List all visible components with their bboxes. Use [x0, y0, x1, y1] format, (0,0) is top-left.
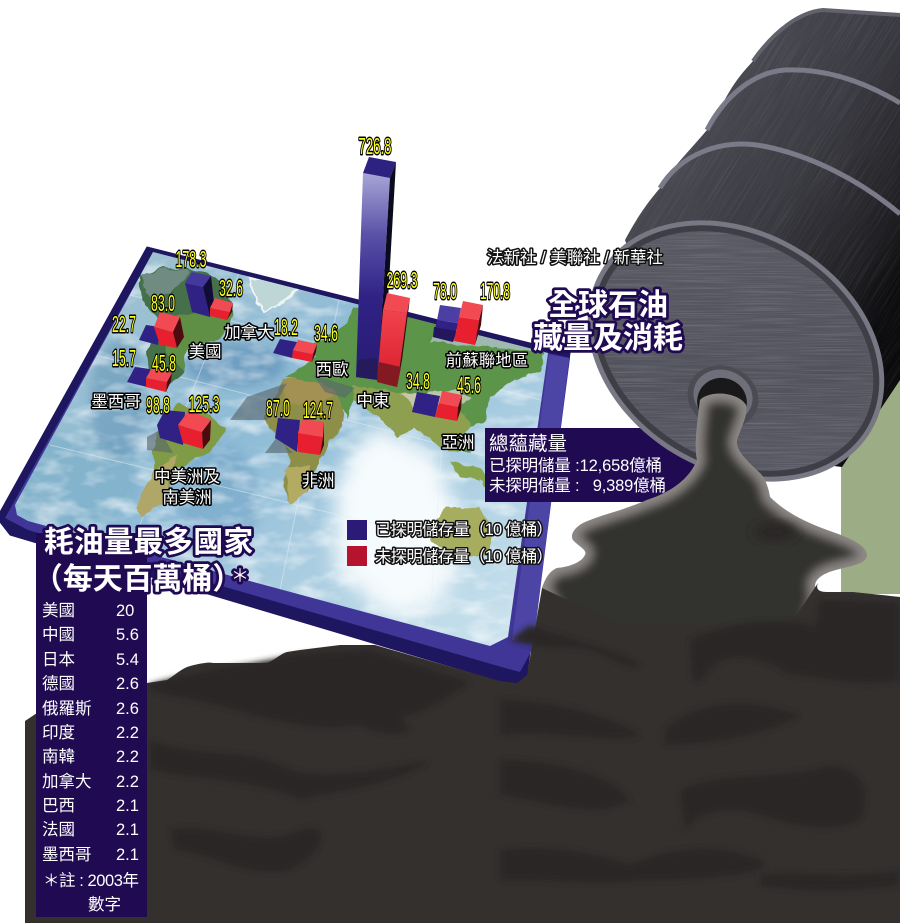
dark oil folds — [150, 600, 900, 891]
bar value labels: 78.0 — [433, 278, 457, 304]
graticule — [50, 270, 560, 620]
bar value labels: 34.8 — [406, 368, 430, 394]
legend: unproven reserves: 未探明儲存量（10 億桶） — [375, 547, 553, 566]
main title: 藏量及消耗 — [533, 322, 683, 355]
bar value labels: 170.8 — [480, 278, 510, 304]
bar value labels: 45.6 — [457, 372, 481, 398]
consumption list: 日本 — [42, 650, 75, 669]
consumption list: 巴西 — [42, 797, 75, 815]
north america — [140, 267, 233, 395]
consumption list: 2.6 — [116, 700, 139, 718]
bar value labels: 15.7 — [112, 345, 136, 371]
consumption list: 中國 — [42, 625, 75, 644]
bar value labels: 32.6 — [219, 275, 243, 301]
bar value labels: 125.3 — [188, 391, 220, 417]
barrel bung — [679, 356, 767, 438]
bar pair: Central and South America — [157, 410, 211, 449]
white ocean spray — [335, 425, 460, 620]
main title: 全球石油 — [548, 289, 668, 322]
bar value labels: 87.0 — [266, 395, 290, 421]
panel heading: 耗油量最多國家 — [44, 526, 253, 559]
green background panel — [841, 370, 900, 594]
source credit: 法新社 / 美聯社 / 新華社 — [487, 248, 663, 267]
bar shadows — [147, 375, 355, 453]
total reserves callout box — [485, 428, 700, 502]
bar value labels: 178.3 — [176, 246, 206, 272]
bar pair: USA — [139, 312, 184, 348]
bar pair: Mexico — [127, 367, 172, 392]
map board — [0, 240, 570, 683]
consumption list: 5.4 — [116, 651, 139, 669]
barrel body — [625, 8, 900, 467]
region labels: 美國 — [188, 342, 222, 361]
bar pair: former Soviet states — [433, 301, 483, 345]
consumption list: 5.6 — [116, 626, 139, 644]
region labels: 前蘇聯地區 — [446, 351, 528, 370]
total reserves callout box: 未探明儲量 : 9,389億桶 — [489, 476, 666, 495]
region labels: 中美洲及 — [154, 467, 220, 486]
consumption list: 美國 — [42, 601, 75, 620]
panel heading: （每天百萬桶） — [33, 563, 242, 596]
region labels: 中東 — [356, 391, 390, 410]
bar value labels: 83.0 — [151, 290, 175, 316]
bar pair: Middle East — [356, 157, 410, 387]
bar value labels: 124.7 — [303, 397, 333, 423]
legend — [347, 520, 553, 566]
consumption list: 德國 — [42, 674, 75, 693]
barrel lid — [588, 220, 884, 482]
bar value labels: 726.8 — [358, 133, 392, 159]
consumption list: 2.2 — [116, 724, 139, 742]
region labels: 非洲 — [302, 471, 334, 490]
consumption list: 印度 — [42, 723, 75, 742]
region labels — [91, 322, 528, 507]
consumption list: 2.2 — [116, 773, 139, 791]
bar value labels: 34.6 — [314, 320, 338, 346]
bar value labels: 18.2 — [274, 314, 298, 340]
bar value labels: 269.3 — [386, 267, 418, 293]
region labels: 墨西哥 — [91, 393, 141, 411]
panel heading: ＊ — [231, 566, 249, 586]
legend: proven reserves: 已探明儲存量（10 億桶） — [375, 520, 553, 539]
consumption list: 2.6 — [116, 675, 139, 693]
consumption list: 20 — [116, 602, 134, 620]
total reserves callout box: 總蘊藏量 — [489, 433, 567, 455]
region labels: 南美洲 — [162, 488, 212, 507]
panel heading — [33, 526, 253, 596]
consumption list: 2.1 — [116, 797, 139, 815]
panel: top oil consuming countries — [33, 526, 253, 917]
bar pair: Africa — [275, 418, 324, 455]
region labels: 亞洲 — [442, 434, 474, 452]
board frame — [0, 247, 570, 683]
consumption list: 法國 — [42, 820, 75, 839]
africa — [263, 373, 343, 503]
footnote: 數字 — [88, 895, 121, 914]
consumption list: 2.2 — [116, 748, 139, 766]
consumption list: 南韓 — [42, 747, 75, 766]
bar value labels: 98.8 — [146, 392, 170, 418]
footnote: ＊註 : 2003年 — [43, 871, 139, 890]
greenland — [250, 277, 307, 310]
consumption list — [42, 601, 139, 864]
consumption list: 2.1 — [116, 821, 139, 839]
consumption list: 墨西哥 — [42, 846, 92, 864]
eurasia — [287, 307, 547, 453]
region labels: 加拿大 — [224, 322, 274, 342]
bar value labels: 45.8 — [152, 350, 176, 376]
3D bars — [127, 157, 483, 455]
footnote — [43, 871, 139, 914]
region labels: 西歐 — [316, 360, 348, 379]
oil stream and upper blob — [542, 394, 867, 625]
south america — [137, 403, 227, 517]
consumption list: 加拿大 — [42, 771, 92, 791]
bar pair: Canada — [185, 272, 233, 320]
oil barrel — [588, 8, 900, 482]
bar value labels — [112, 133, 510, 423]
consumption list: 2.1 — [116, 846, 139, 864]
main title — [533, 289, 683, 355]
bar pair: Asia — [412, 391, 462, 421]
total reserves callout box: 已探明儲量 :12,658億桶 — [489, 456, 662, 475]
oil puddle — [25, 583, 900, 923]
australia and islands — [430, 507, 493, 555]
bar pair: Western Europe — [273, 339, 317, 362]
bar value labels: 22.7 — [112, 311, 136, 337]
consumption list: 俄羅斯 — [42, 699, 92, 718]
